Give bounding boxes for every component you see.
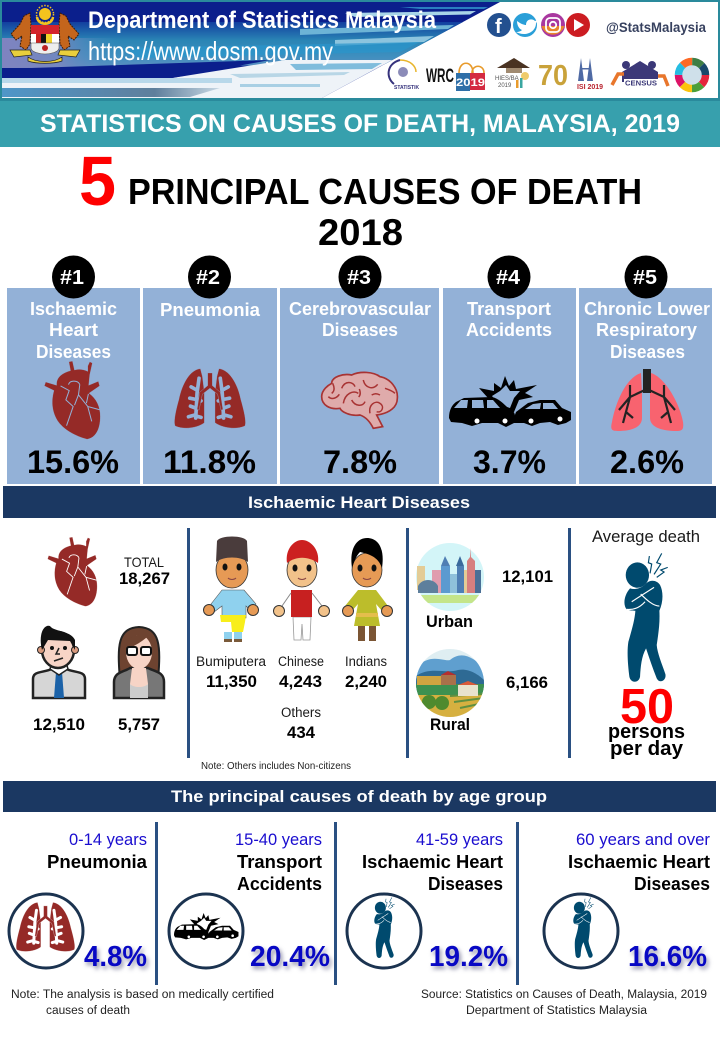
social icons: f xyxy=(495,16,502,38)
panel: average death: Average death xyxy=(592,528,700,546)
male count: 12,510 xyxy=(33,715,85,734)
rank badge 1: #1 xyxy=(60,267,84,289)
teal title band xyxy=(0,101,720,147)
rank badge 5 xyxy=(624,256,668,298)
rank badge 3 xyxy=(338,256,382,298)
panel: cause 4 transport accidents: 3.7% xyxy=(473,444,546,480)
total xyxy=(119,554,170,588)
panel: age 15-40: Transport xyxy=(237,852,322,872)
source: Source: Statistics on Causes of Death, Malaysia, 2019 xyxy=(421,989,707,1001)
teal title band: STATISTICS ON CAUSES OF DEATH, MALAYSIA, 2019 xyxy=(40,110,680,138)
icon: rural xyxy=(416,649,484,717)
panel: average death: persons xyxy=(608,721,685,743)
panel: cause 1 ischaemic heart diseases: Diseases xyxy=(36,342,111,362)
panel: average death xyxy=(592,528,700,760)
panel: cause 4 transport accidents: Accidents xyxy=(466,320,552,340)
social handle: @StatsMalaysia xyxy=(606,19,706,35)
panel: age 41-59 xyxy=(347,831,508,973)
section heading: ischaemic heart diseases xyxy=(3,486,716,518)
panel: age 0-14 xyxy=(9,831,148,973)
icon: indian figure xyxy=(342,538,392,641)
rank badge 4: #4 xyxy=(496,267,521,289)
source xyxy=(421,989,707,1017)
rank badge 3: #3 xyxy=(347,267,371,289)
panel: ethnicity: 2,240 xyxy=(345,672,387,691)
main heading xyxy=(79,142,642,253)
total: TOTAL xyxy=(124,554,164,570)
panel: age 41-59: Diseases xyxy=(428,874,503,894)
social icons xyxy=(487,13,590,38)
footnote xyxy=(11,989,274,1017)
panel: ethnicity: 11,350 xyxy=(206,672,257,691)
banner url: https://www.dosm.gov.my xyxy=(88,36,333,66)
main heading: 2018 xyxy=(318,212,403,253)
panel: age 41-59: 41-59 years xyxy=(416,831,503,849)
panel: cause 3 cerebrovascular diseases xyxy=(280,256,439,484)
female count: 5,757 xyxy=(118,715,160,734)
panel: age 15-40: Accidents xyxy=(237,874,322,894)
partner logos: 70 xyxy=(538,60,568,92)
panel: cause 1 ischaemic heart diseases: 15.6% xyxy=(27,444,119,480)
section heading: age group: The principal causes of death by age group xyxy=(171,788,547,806)
icon: brain xyxy=(322,372,397,428)
footnote: causes of death xyxy=(46,1005,130,1017)
total: 18,267 xyxy=(119,569,170,588)
panel: ethnicity: Chinese xyxy=(278,654,324,669)
banner title: Department of Statistics Malaysia xyxy=(88,7,437,34)
panel: cause 5 chronic lower respiratory diseases xyxy=(579,256,712,484)
panel: cause 2 pneumonia: Pneumonia xyxy=(160,300,261,320)
icon: urban xyxy=(416,543,484,611)
panel: ethnicity: Bumiputera xyxy=(196,654,266,669)
rank badge 2 xyxy=(188,256,231,298)
partner logos: CENSUS xyxy=(625,78,657,88)
rank badge 1 xyxy=(52,256,95,298)
icon: bumiputera figure xyxy=(204,536,258,642)
panel: age 15-40: 20.4% xyxy=(250,941,330,973)
partner logos: 2019 xyxy=(498,83,512,89)
icon: female xyxy=(114,627,164,698)
icon: car crash xyxy=(449,376,571,427)
urban count: 12,101 xyxy=(502,567,553,586)
panel: age 0-14: 0-14 years xyxy=(69,831,147,849)
rural count: 6,166 xyxy=(506,673,548,692)
partner logos xyxy=(389,58,706,92)
panel: age 60 and over xyxy=(544,831,710,973)
panel: age 0-14: Pneumonia xyxy=(47,852,148,872)
crest xyxy=(10,6,80,63)
panel: age 15-40: 15-40 years xyxy=(235,831,322,849)
partner logos: 2019 xyxy=(456,77,485,89)
icon: person in pain xyxy=(624,553,668,682)
panel: cause 1 ischaemic heart diseases xyxy=(7,256,140,484)
label: urban: Urban xyxy=(426,612,473,631)
panel: cause 5 chronic lower respiratory diseases: Respiratory xyxy=(596,320,697,340)
panel: cause 3 cerebrovascular diseases: Diseases xyxy=(322,320,398,340)
panel: cause 2 pneumonia: 11.8% xyxy=(163,444,256,480)
panel: age 0-14: 4.8% xyxy=(84,941,147,973)
panel: age 41-59: 19.2% xyxy=(429,941,508,973)
partner logos: ISI 2019 xyxy=(577,84,603,91)
panel: average death: per day xyxy=(610,738,684,760)
rank badge 5: #5 xyxy=(633,267,657,289)
panel: ethnicity: 4,243 xyxy=(279,672,322,691)
panel: average death: 50 xyxy=(620,680,674,734)
partner logos: STATISTIK xyxy=(394,85,419,91)
panel: cause 1 ischaemic heart diseases: Ischaemic xyxy=(30,299,117,319)
icon: lungs circle xyxy=(9,894,83,968)
panel: cause 4 transport accidents xyxy=(443,256,576,484)
icon: male xyxy=(33,626,85,698)
panel: total and sex xyxy=(33,537,170,734)
panel: ethnicity: Indians xyxy=(345,654,387,669)
icon: heart xyxy=(44,361,100,439)
panel: cause 1 ischaemic heart diseases: Heart xyxy=(49,320,98,340)
label: rural: Rural xyxy=(430,715,470,734)
panel: cause 3 cerebrovascular diseases: Cerebrovascular xyxy=(289,299,431,319)
panel: strata xyxy=(416,543,553,734)
panel: cause 5 chronic lower respiratory diseases: 2.6% xyxy=(610,444,684,480)
panel: age 60 and over: Diseases xyxy=(634,874,710,894)
icon: diseased lungs xyxy=(611,369,683,431)
rank badge 4 xyxy=(488,256,530,298)
footnote: Note: The analysis is based on medically certified xyxy=(11,989,274,1001)
panel: cause 5 chronic lower respiratory diseases: Chronic Lower xyxy=(584,299,710,319)
header banner xyxy=(0,0,720,101)
rank badge 2: #2 xyxy=(196,267,220,289)
main heading: PRINCIPAL CAUSES OF DEATH xyxy=(128,171,642,212)
panel: ethnicity: 434 xyxy=(287,723,316,742)
icon: person circle xyxy=(347,894,421,968)
partner logos: HIES/BA xyxy=(495,76,519,82)
panel: ethnicity xyxy=(196,536,392,742)
panel: age 15-40 xyxy=(169,831,330,973)
panel: cause 2 pneumonia xyxy=(143,256,277,484)
icon: heart small xyxy=(48,537,97,606)
panel: age 60 and over: 60 years and over xyxy=(576,831,710,849)
note: others: Note: Others includes Non-citizens xyxy=(201,760,351,772)
panel: cause 5 chronic lower respiratory diseases: Diseases xyxy=(610,342,685,362)
icon: car crash circle xyxy=(169,894,243,968)
panel: age 60 and over: 16.6% xyxy=(628,941,707,973)
panel: age 41-59: Ischaemic Heart xyxy=(362,852,503,872)
panel: age 60 and over: Ischaemic Heart xyxy=(568,852,710,872)
panel: ethnicity: Others xyxy=(281,705,321,720)
partner logos: WRC xyxy=(426,66,454,87)
panel: cause 4 transport accidents: Transport xyxy=(467,299,551,319)
panel: cause 3 cerebrovascular diseases: 7.8% xyxy=(323,444,397,480)
icon: person circle xyxy=(544,894,618,968)
icon: chinese figure xyxy=(274,540,330,640)
source: Department of Statistics Malaysia xyxy=(466,1005,648,1017)
icon: lungs xyxy=(174,369,246,428)
section heading: age group xyxy=(3,781,716,812)
section heading: ischaemic heart diseases: Ischaemic Heart Diseases xyxy=(248,494,470,512)
main heading: 5 xyxy=(79,142,116,220)
